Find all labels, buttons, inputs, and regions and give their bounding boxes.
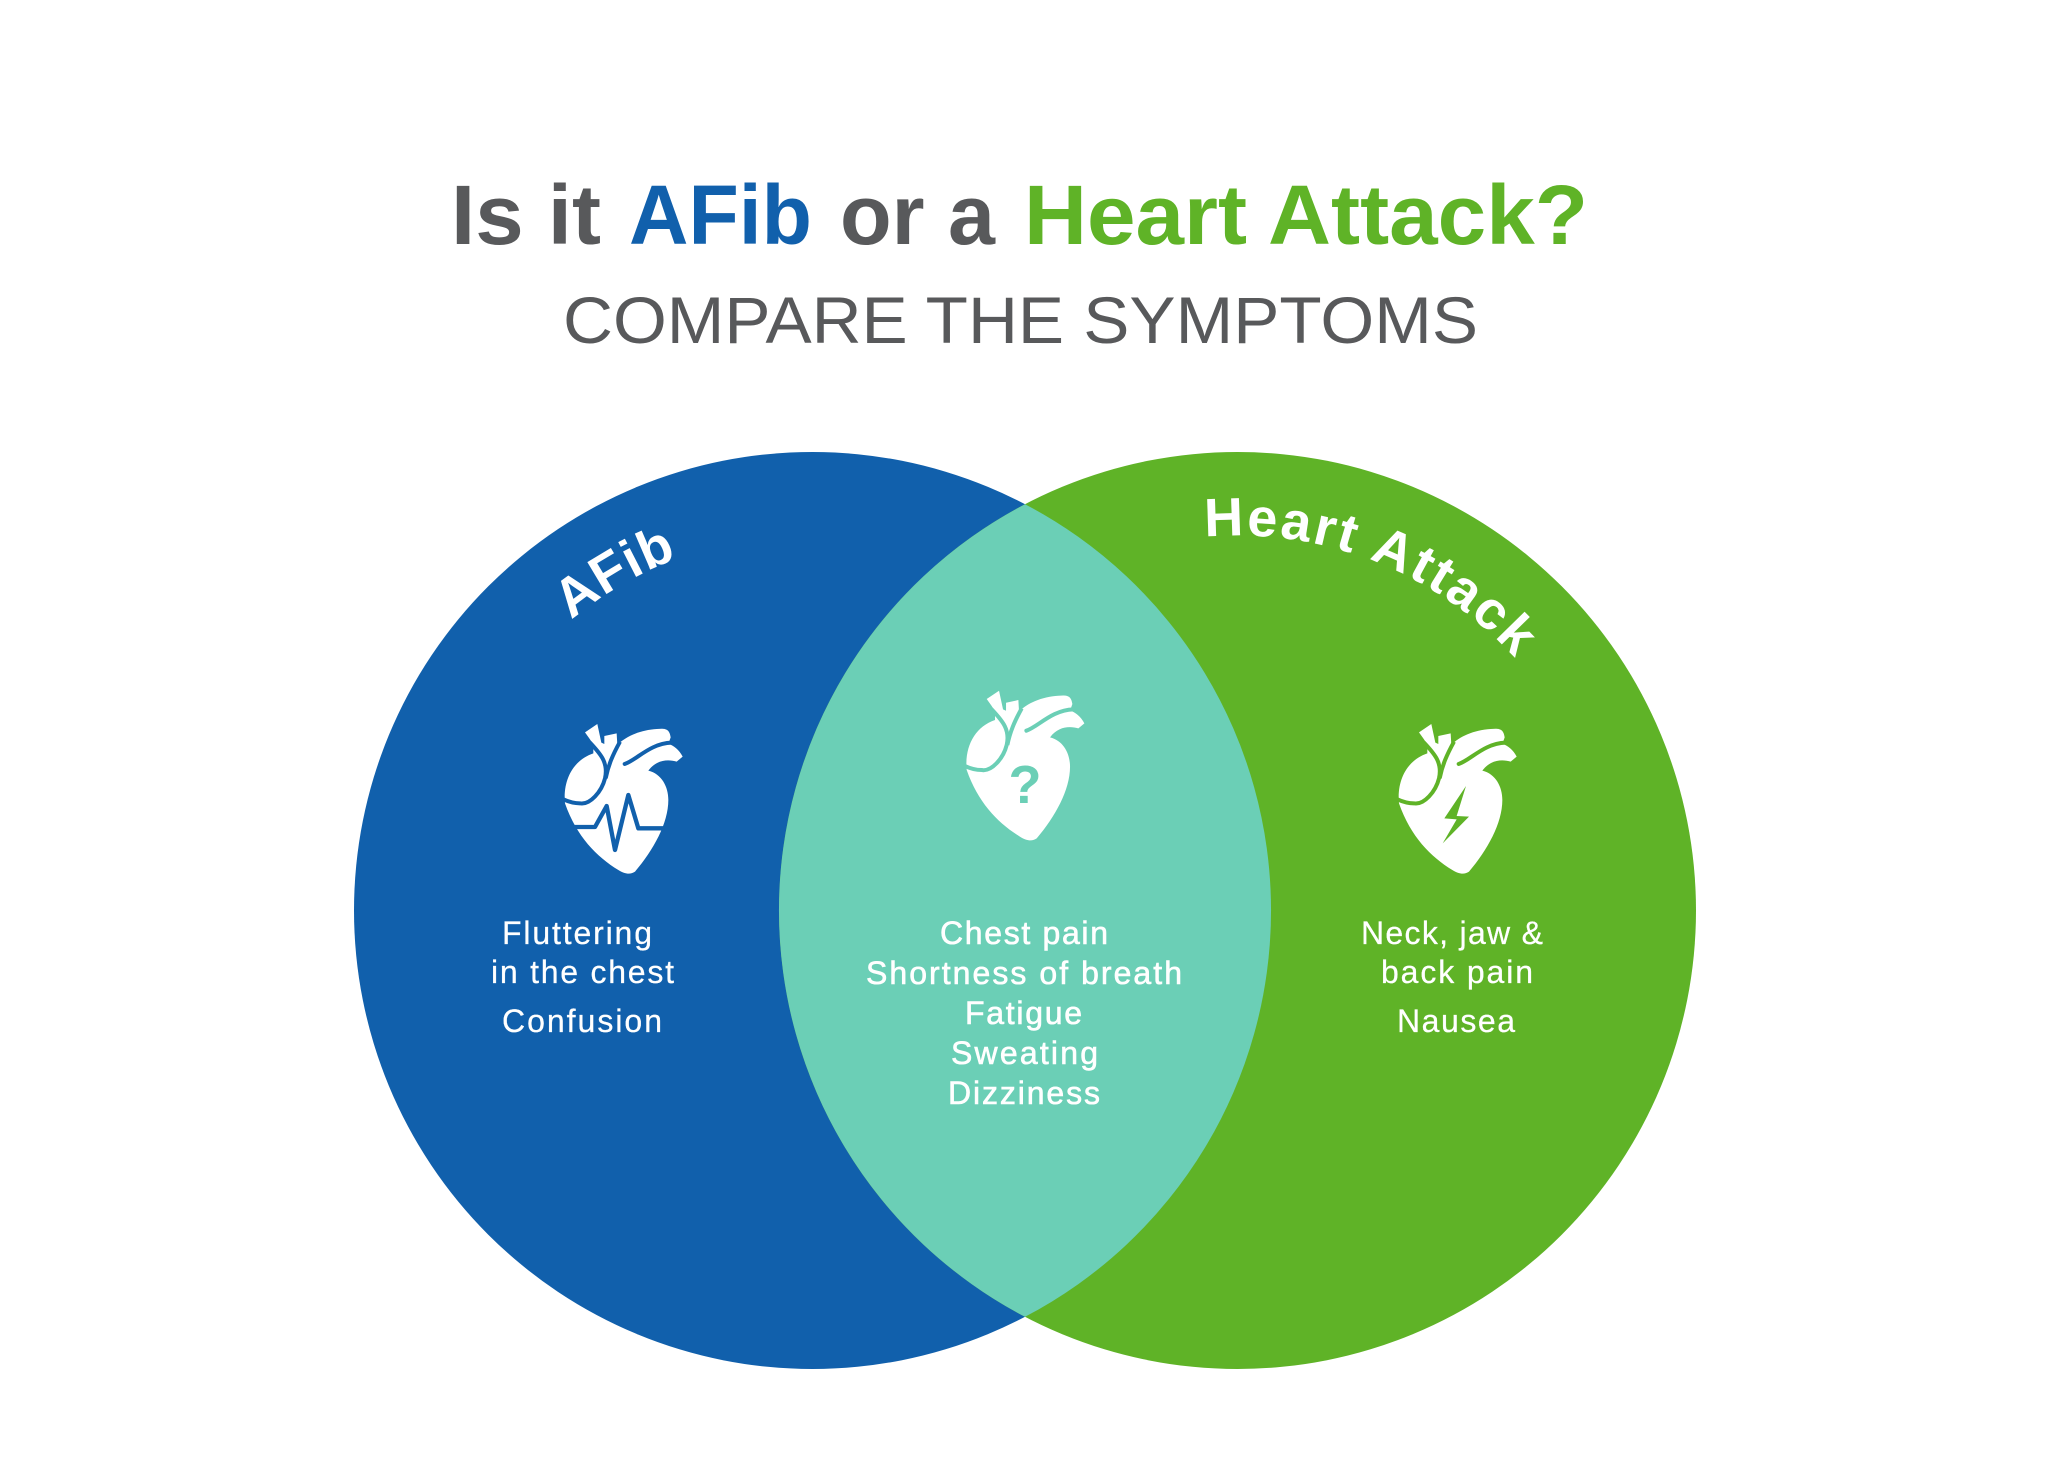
- text: shared symptoms: Chest pain: [940, 915, 1108, 951]
- icon: question mark: ?: [1008, 755, 1042, 815]
- icon: heart with lightning bolt: [1397, 724, 1517, 874]
- label: AFib: AFib: [561, 530, 672, 619]
- title: AFib: [629, 168, 812, 262]
- text: Heart Attack symptoms: Nausea: [1397, 1003, 1515, 1039]
- text: AFib symptoms: in the chest: [491, 954, 674, 990]
- text: AFib symptoms: Fluttering: [502, 915, 652, 951]
- text: Heart Attack symptoms: back pain: [1381, 954, 1533, 990]
- subtitle: COMPARE THE SYMPTOMS: [563, 283, 1478, 357]
- title: [451, 168, 1588, 262]
- title: or a: [840, 168, 996, 262]
- text: shared symptoms: Fatigue: [965, 995, 1082, 1031]
- circle: AFib: [354, 452, 1271, 1369]
- text: AFib symptoms: [491, 915, 674, 1039]
- text: shared symptoms: Dizziness: [948, 1075, 1100, 1111]
- circle: Heart Attack: [779, 452, 1696, 1369]
- title: Heart Attack?: [1024, 168, 1588, 262]
- label: Heart Attack: Heart Attack: [1207, 498, 1535, 658]
- text: Heart Attack symptoms: [1361, 915, 1543, 1039]
- icon: heart with question mark: [965, 691, 1084, 840]
- text: shared symptoms: [866, 915, 1182, 1111]
- text: AFib symptoms: Confusion: [502, 1003, 662, 1039]
- text: shared symptoms: Sweating: [951, 1035, 1098, 1071]
- icon: heart with pulse: [563, 724, 683, 874]
- title: Is it: [451, 168, 601, 262]
- overlap: shared symptoms: [779, 504, 1271, 1317]
- text: Heart Attack symptoms: Neck, jaw &: [1361, 915, 1543, 951]
- text: shared symptoms: Shortness of breath: [866, 955, 1182, 991]
